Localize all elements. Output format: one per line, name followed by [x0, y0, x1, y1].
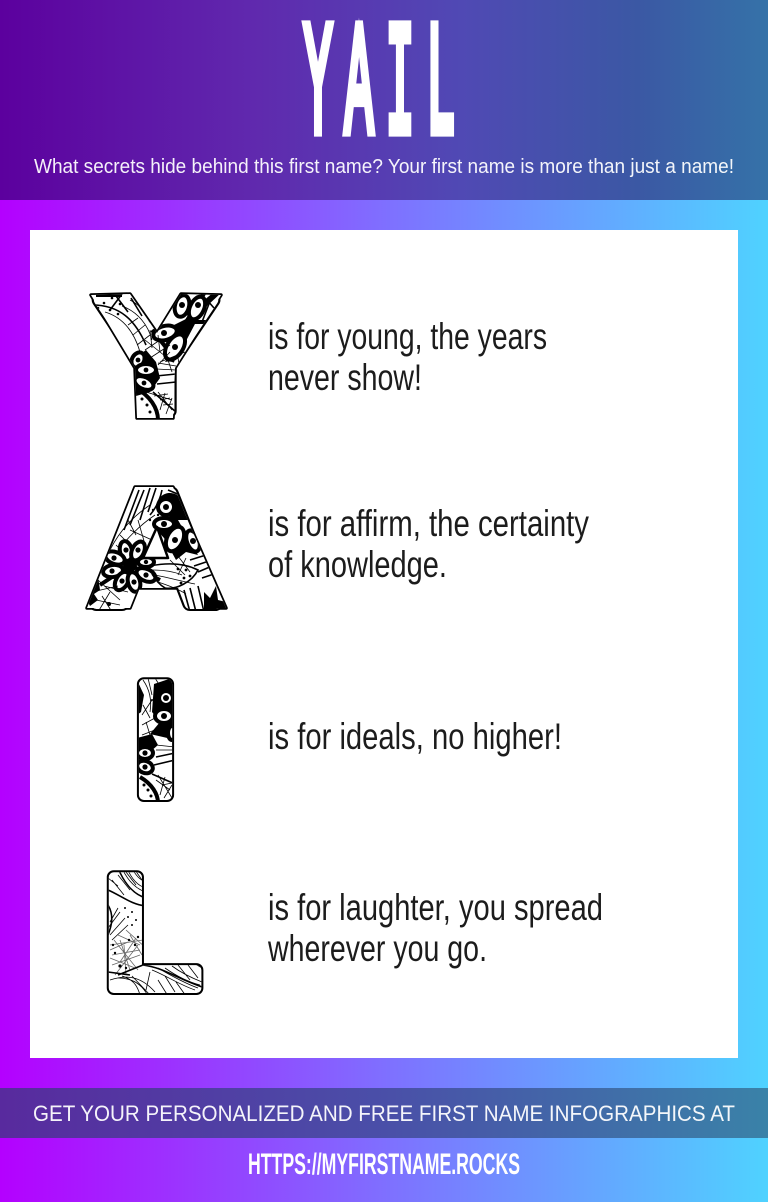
- text: letter I line: is for ideals, no higher!: [268, 716, 562, 757]
- icon: zentangle letter A: A: [92, 458, 220, 638]
- icon: zentangle letter I: I: [133, 650, 178, 830]
- header band: [0, 0, 768, 200]
- text: letter A line: of knowledge.: [268, 544, 447, 585]
- text: letter L line: [267, 887, 603, 969]
- icon: zentangle letter I: I: [133, 650, 178, 830]
- subtitle: What secrets hide behind this first name? Your first name is more than just a name!: [34, 156, 734, 178]
- icon detail: counter of letter A: [143, 527, 168, 558]
- footer call to action: GET YOUR PERSONALIZED AND FREE FIRST NAME INFOGRAPHICS AT: [33, 1101, 735, 1126]
- icon: zentangle letter Y: Y: [96, 266, 216, 446]
- footer band: [0, 1088, 768, 1138]
- footer url: HTTPS://MYFIRSTNAME.ROCKS: [248, 1148, 520, 1181]
- text: letter Y line: is for young, the years: [268, 316, 547, 357]
- text: letter L line: wherever you go.: [267, 928, 487, 969]
- icon: zentangle letter L: L: [103, 843, 201, 1023]
- icon: zentangle letter Y: Y: [96, 266, 216, 446]
- icon: zentangle letter Y: [89, 292, 223, 420]
- icon: zentangle letter L: L: [103, 843, 201, 1023]
- text: letter Y line: [268, 316, 547, 398]
- icon: zentangle letter A: A: [92, 458, 220, 638]
- icon: zentangle letter L: [106, 870, 204, 995]
- text: letter A line: [268, 503, 589, 585]
- icon: zentangle letter A: [85, 485, 228, 611]
- title: YAIL: [304, 0, 455, 179]
- icon: zentangle letter I: [136, 677, 174, 802]
- text: letter L line: is for laughter, you spread: [268, 887, 603, 928]
- text: letter A line: is for affirm, the certainty: [268, 503, 589, 544]
- white content panel: [30, 230, 738, 1058]
- text: letter Y line: never show!: [268, 357, 422, 398]
